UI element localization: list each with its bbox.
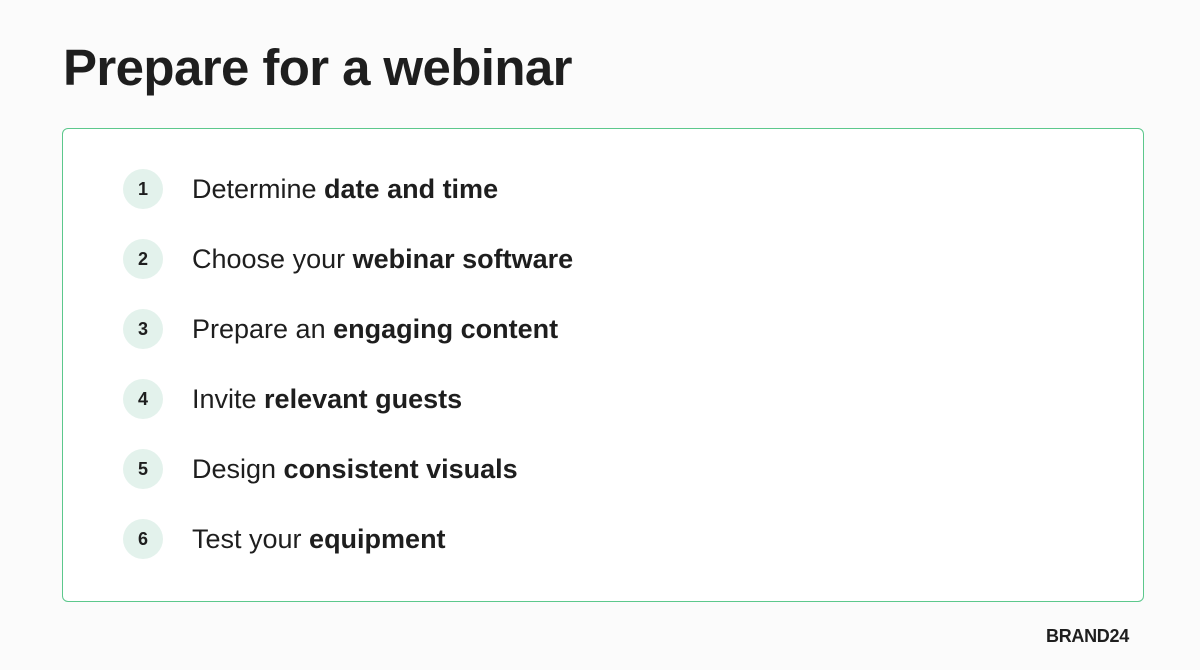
step 1: 1: [138, 179, 148, 199]
step 4: [123, 379, 462, 419]
step 3: [123, 309, 558, 349]
step 5: Design consistent visuals: [192, 454, 518, 484]
step 6: [123, 519, 446, 559]
title: Prepare for a webinar: [63, 39, 572, 96]
step 1: [123, 169, 498, 209]
step 4: 4: [138, 389, 148, 409]
panel: steps list: [62, 128, 1144, 602]
step 3: Prepare an engaging content: [192, 314, 558, 344]
step 6: Test your equipment: [192, 524, 446, 554]
step 5: 5: [138, 459, 148, 479]
step 1: Determine date and time: [192, 174, 498, 204]
brand logo: BRAND24: [1046, 626, 1129, 646]
step 4: Invite relevant guests: [192, 384, 462, 414]
step 5: [123, 449, 518, 489]
step 3: 3: [138, 319, 148, 339]
step 2: Choose your webinar software: [192, 244, 573, 274]
step 6: 6: [138, 529, 148, 549]
step 2: 2: [138, 249, 148, 269]
step 2: [123, 239, 573, 279]
